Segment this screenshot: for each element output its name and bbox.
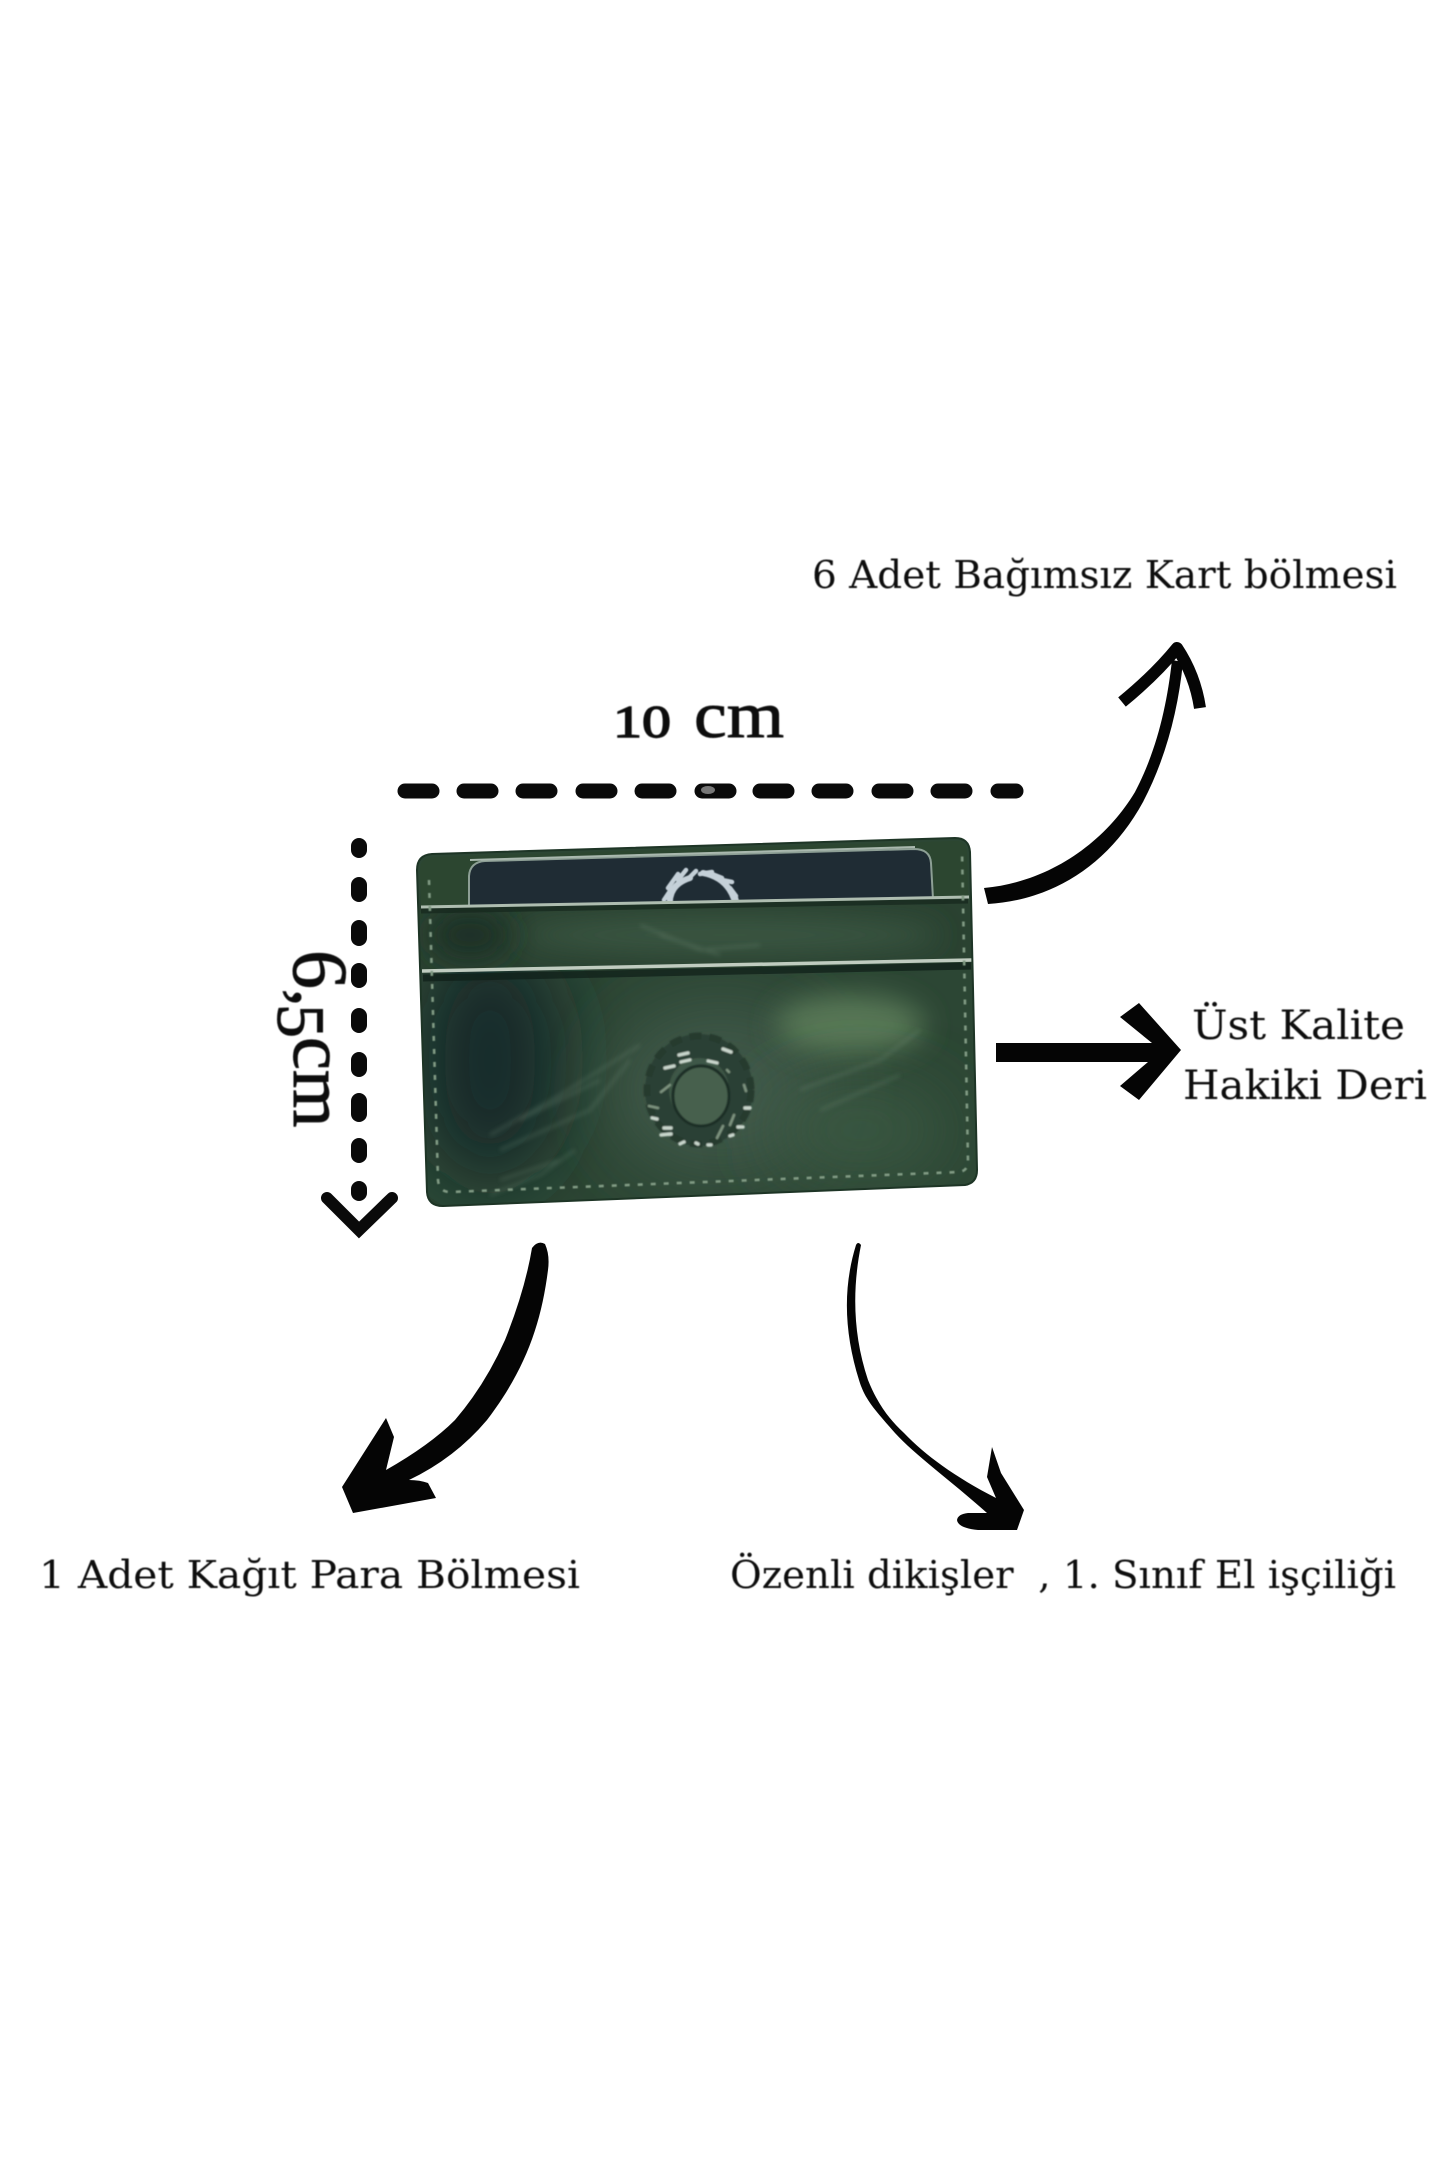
width dimension label: cm — [694, 679, 784, 752]
label: genuine leather — [1183, 1002, 1427, 1109]
arrow to banknote compartment — [342, 1243, 549, 1513]
width dashed line — [405, 786, 1016, 794]
leather creases — [490, 925, 920, 1195]
top tabs — [420, 841, 968, 908]
wallet body — [417, 838, 977, 1206]
height dimension label: 6 — [277, 950, 364, 989]
height dimension label: 5 — [263, 1004, 339, 1038]
leather shading — [422, 912, 933, 1200]
stitching — [429, 850, 968, 1192]
label: genuine leather: Hakiki Deri — [1183, 1063, 1427, 1109]
width dimension label: 10 — [613, 696, 671, 747]
height dimension label: , — [278, 989, 355, 1006]
wallet photo — [410, 838, 990, 1206]
arrow to leather label — [996, 1003, 1181, 1100]
label: banknote compartment: 1 Adet Kağıt Para Bölmesi — [39, 1553, 580, 1597]
label: stitching and craftsmanship: Özenli dikişler , 1. Sınıf El işçiliği — [730, 1553, 1396, 1597]
label: card compartments: 6 Adet Bağımsız Kart bölmesi — [812, 553, 1397, 597]
pocket seam lines — [421, 897, 972, 978]
height dimension label: cm — [277, 1037, 359, 1127]
arrow to stitching label — [847, 1243, 1024, 1530]
small wreath on card — [664, 870, 738, 906]
card inside slot — [469, 849, 933, 906]
arrow to card compartments — [984, 648, 1200, 904]
top edge highlight — [470, 847, 915, 860]
label: genuine leather: Üst Kalite — [1192, 1002, 1405, 1049]
embossed wreath — [647, 1036, 751, 1145]
height dashed line with arrowhead — [327, 846, 392, 1230]
wallet outline — [417, 838, 977, 1206]
